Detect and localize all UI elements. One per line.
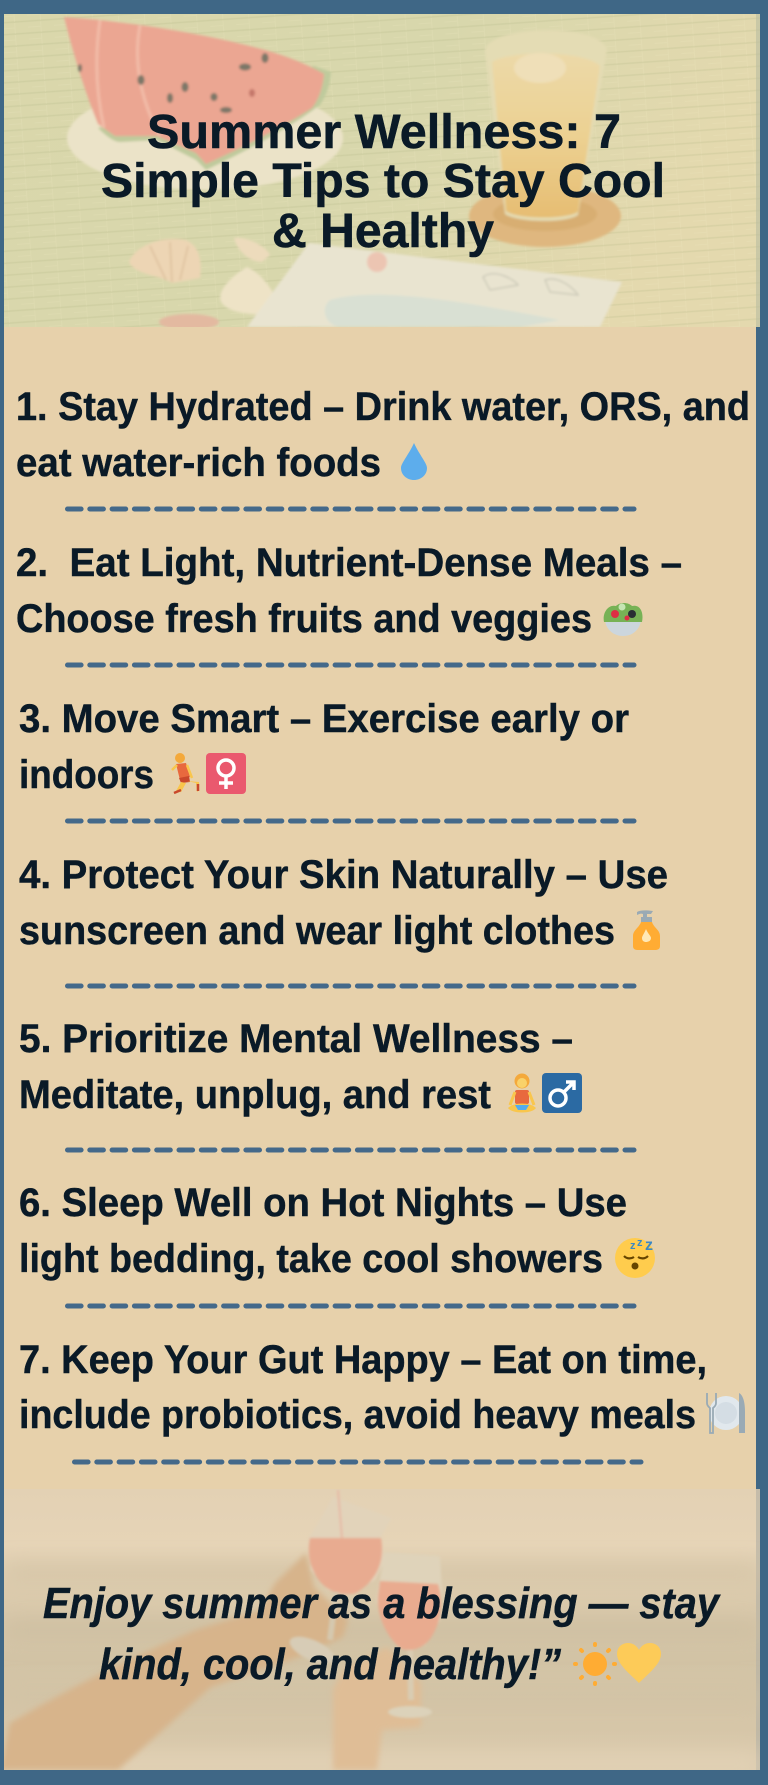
right arm bbox=[333, 1647, 421, 1770]
tip 7: 7. Keep Your Gut Happy – Eat on time, bbox=[19, 1338, 707, 1382]
title: Summer Wellness: 7 bbox=[147, 106, 621, 159]
tip 3 bbox=[19, 697, 629, 797]
tip 4: sunscreen and wear light clothes bbox=[19, 909, 615, 953]
plate shape bbox=[66, 107, 344, 190]
sea shells bbox=[129, 239, 201, 283]
watermelon seeds bbox=[78, 53, 268, 113]
title bbox=[101, 106, 665, 258]
watermelon rind bbox=[98, 66, 331, 170]
blurred sea bands bbox=[756, 1753, 760, 1770]
tip 7: include probiotics, avoid heavy meals bbox=[19, 1393, 696, 1437]
icon: sleeping face: z bbox=[637, 1237, 643, 1249]
tip 5 bbox=[19, 1017, 582, 1117]
icon: salad bowl bbox=[604, 603, 643, 636]
icon: female sign bbox=[206, 753, 246, 794]
tip 5: 5. Prioritize Mental Wellness – bbox=[19, 1017, 573, 1061]
title: & Healthy bbox=[272, 205, 494, 258]
paper with child's drawing bbox=[247, 243, 622, 327]
icon: sleeping face: z bbox=[645, 1237, 653, 1254]
coaster bbox=[469, 185, 621, 247]
tip 5: Meditate, unplug, and rest bbox=[19, 1073, 491, 1117]
panel: header photo of watermelon and iced tea bbox=[4, 14, 760, 330]
tip 6 bbox=[19, 1181, 655, 1281]
right glass bbox=[377, 1555, 442, 1600]
tip 6: 6. Sleep Well on Hot Nights – Use bbox=[19, 1181, 627, 1225]
icon: woman running bbox=[172, 753, 199, 793]
tip 2: Choose fresh fruits and veggies bbox=[16, 597, 592, 641]
panel: footer photo of two glasses toasting at the beach bbox=[0, 1489, 760, 1773]
icon: water drop bbox=[401, 443, 427, 480]
glass of iced tea bbox=[485, 30, 607, 221]
tip 3: 3. Move Smart – Exercise early or bbox=[19, 697, 629, 741]
tip 7 bbox=[19, 1338, 745, 1437]
icon: sleeping face bbox=[615, 1237, 655, 1278]
watermelon flesh bbox=[64, 17, 324, 164]
title: Simple Tips to Stay Cool bbox=[101, 155, 665, 208]
icon: sleeping face: z bbox=[630, 1240, 636, 1252]
tip 3: indoors bbox=[19, 753, 154, 797]
icon: lotion bottle bbox=[633, 910, 660, 950]
left glass bbox=[310, 1562, 382, 1580]
tip 4: 4. Protect Your Skin Naturally – Use bbox=[19, 853, 668, 897]
icon: person meditating bbox=[508, 1074, 536, 1112]
icon: sun bbox=[575, 1644, 615, 1684]
closing message bbox=[43, 1579, 721, 1689]
tip 1: eat water-rich foods bbox=[16, 441, 381, 485]
tip 2: 2. Eat Light, Nutrient-Dense Meals – bbox=[16, 541, 682, 585]
left arm bbox=[0, 1553, 348, 1770]
icon: male sign bbox=[542, 1073, 582, 1113]
tip 4 bbox=[19, 853, 668, 953]
closing message: kind, cool, and healthy!” bbox=[99, 1640, 561, 1689]
tip 2 bbox=[16, 541, 682, 641]
tip 1 bbox=[16, 385, 750, 485]
icon: fork, knife and plate bbox=[707, 1393, 745, 1433]
tip 6: light bedding, take cool showers bbox=[19, 1237, 603, 1281]
icon: yellow heart bbox=[617, 1643, 661, 1683]
